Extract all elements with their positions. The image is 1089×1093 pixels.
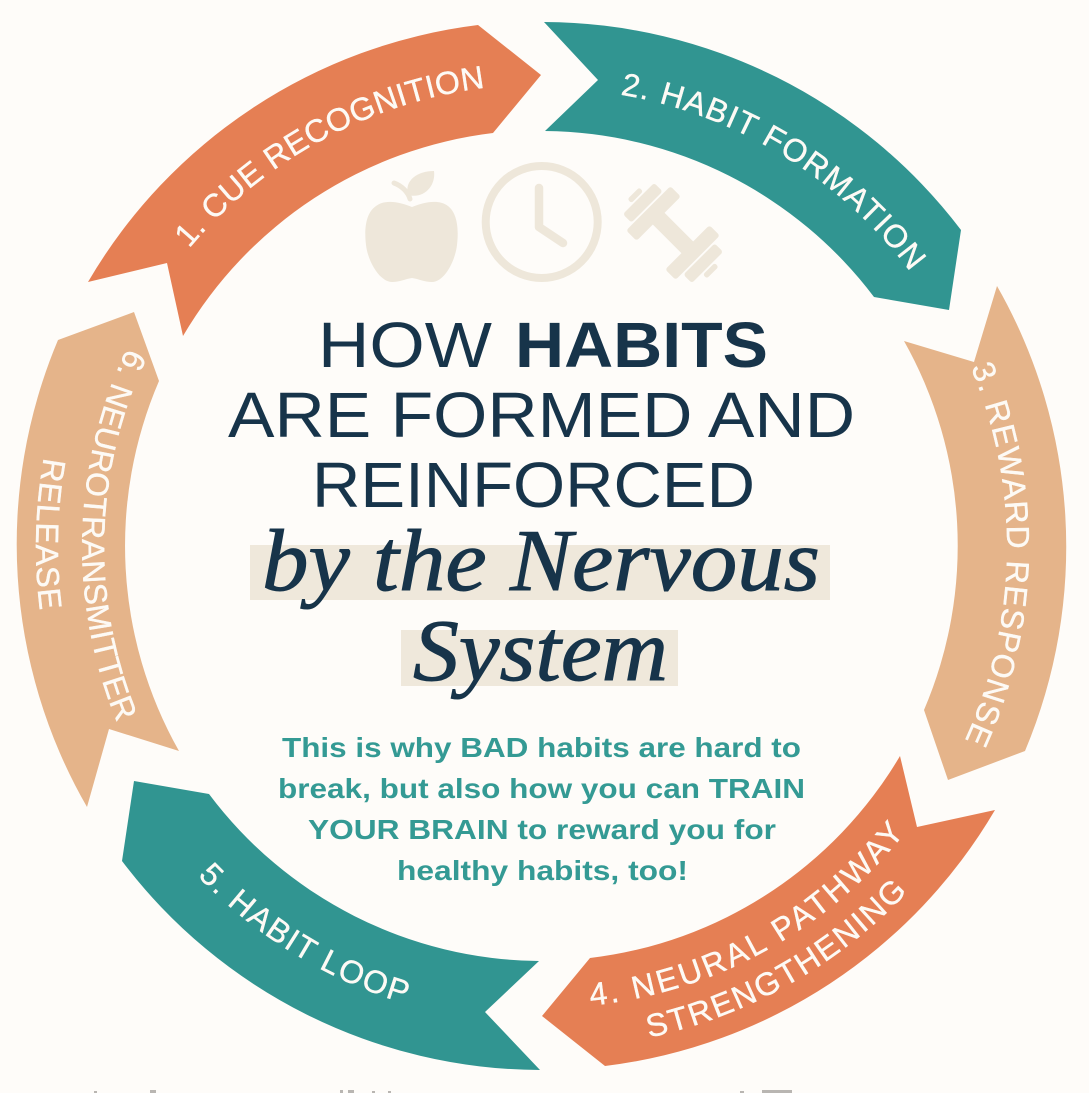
arrow 1: cue recognition bbox=[88, 25, 541, 336]
description text: This is why BAD habits are hard to bbox=[282, 732, 801, 763]
arrow 5: habit loop bbox=[122, 781, 540, 1070]
icon: apple bbox=[365, 171, 458, 282]
title: HOW bbox=[318, 309, 493, 381]
arrow 6: neurotransmitter release bbox=[16, 312, 179, 807]
icon: dumbbell bbox=[611, 171, 735, 295]
label: cue recognition: 1. CUE RECOGNITION bbox=[177, 66, 483, 247]
label: neural pathway strengthening: 4. NEURAL PATHWAY STRENGTHENING bbox=[590, 819, 904, 1036]
arrow 3: reward response bbox=[904, 286, 1066, 780]
arrow 2: habit formation bbox=[544, 22, 961, 310]
title: REINFORCED bbox=[312, 449, 755, 521]
highlighted subtitle line 2: System bbox=[413, 603, 668, 700]
icon: clock bbox=[486, 166, 598, 278]
label: reward response: 3. REWARD RESPONSE bbox=[965, 362, 1030, 748]
label: neurotransmitter release: 6. NEUROTRANSMITTERRELEASE bbox=[36, 352, 144, 722]
title bbox=[228, 309, 855, 521]
description text: healthy habits, too! bbox=[397, 855, 688, 886]
description text: break, but also how you can TRAIN bbox=[278, 773, 805, 804]
title: HABITS bbox=[515, 309, 768, 381]
highlighted subtitle line 1: by the Nervous bbox=[262, 513, 820, 610]
description text bbox=[278, 732, 805, 886]
title: ARE FORMED AND bbox=[228, 379, 855, 451]
label: habit formation: 2. HABIT FORMATION bbox=[622, 74, 926, 270]
arrow 4: neural pathway strengthening bbox=[542, 756, 995, 1066]
description text: YOUR BRAIN to reward you for bbox=[308, 814, 776, 845]
label: habit loop: 5. HABIT LOOP bbox=[200, 862, 409, 1000]
